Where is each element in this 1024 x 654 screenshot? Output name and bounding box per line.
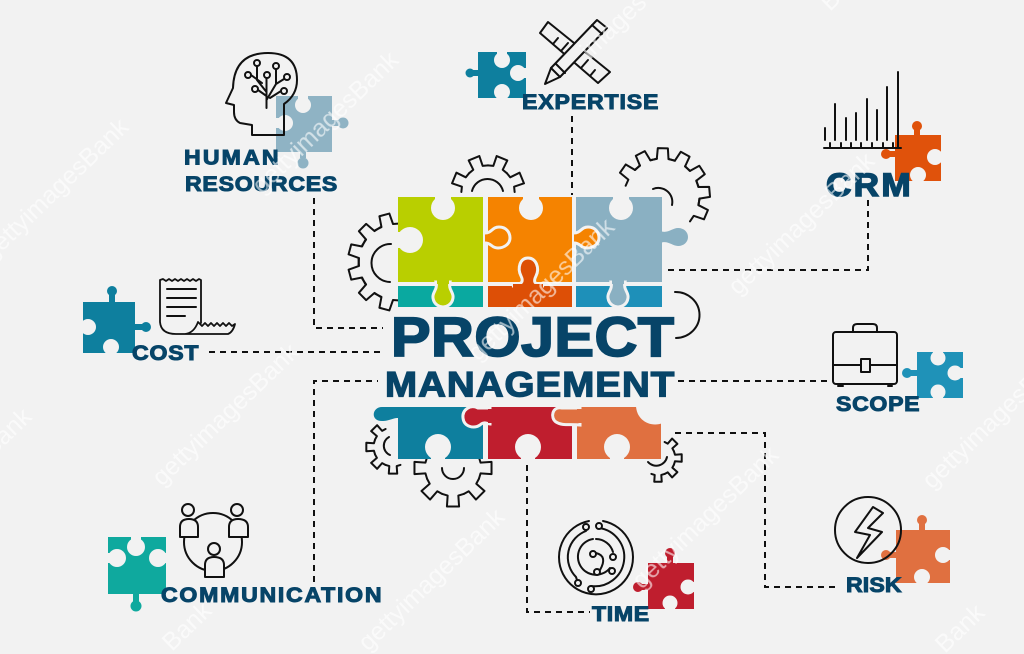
- piece: red-orange strip: [488, 286, 572, 307]
- puzzle piece: teal blue: [80, 286, 151, 355]
- gear: left: [347, 212, 400, 312]
- gear: lower centre: [414, 457, 492, 507]
- label: scope: SCOPE: [836, 392, 920, 416]
- gear: top inner arc: [472, 179, 503, 191]
- panel: risk: [835, 497, 952, 597]
- watermark: gettyimagesBank: [627, 441, 784, 594]
- icon: orbit clock: [559, 521, 633, 594]
- puzzle piece: red: [633, 548, 696, 611]
- piece: lime green: [396, 195, 483, 307]
- title: management: MANAGEMENT: [385, 365, 675, 404]
- gear: top: [450, 154, 526, 192]
- label: cost: COST: [132, 341, 199, 365]
- piece: blue strip: [576, 286, 662, 307]
- label: time: TIME: [592, 602, 649, 626]
- piece: blue grey: [574, 195, 688, 307]
- puzzle piece: teal: [106, 535, 168, 612]
- piece: red: [463, 407, 572, 460]
- icon: lightning bolt in circle: [835, 497, 901, 563]
- piece: orange: [485, 195, 572, 282]
- central puzzle: lower row: [374, 405, 663, 460]
- panel: crm: [824, 72, 943, 204]
- watermark: gettyimagesBank: [147, 338, 304, 491]
- label: human: HUMAN: [184, 145, 279, 169]
- gear: lower centre inner arc: [442, 468, 464, 479]
- label: communication: COMMUNICATION: [161, 583, 382, 607]
- watermark: gettyimagesBank: [463, 213, 620, 366]
- icon: people network: [180, 504, 248, 577]
- piece: coral: [553, 405, 663, 460]
- label: risk: RISK: [846, 573, 902, 597]
- icon: ruler and pencil: [540, 20, 610, 84]
- gear: lower right: [651, 437, 682, 482]
- gear: top right: [616, 148, 711, 226]
- title: [385, 307, 675, 404]
- piece: teal blue: [374, 407, 483, 460]
- label: crm: CRM: [826, 168, 911, 204]
- panel: time: [559, 521, 696, 626]
- gear: lower left: [366, 423, 400, 474]
- arc: right of puzzle: [675, 292, 700, 338]
- icon: head with circuit tree: [226, 53, 297, 135]
- panel: communication: [106, 504, 382, 612]
- puzzle piece: coral: [881, 515, 952, 585]
- watermark: gettyimagesBank: [247, 46, 404, 199]
- icon: bar chart: [824, 72, 901, 148]
- dashed connectors: [209, 116, 868, 612]
- icon: receipt: [160, 279, 235, 334]
- icon: briefcase: [833, 324, 897, 386]
- watermark: gettyimagesBank: [723, 147, 880, 300]
- watermark: gettyimagesBank: [353, 503, 510, 654]
- gear: lower left inner arc: [384, 437, 390, 455]
- puzzle piece: orange red: [881, 121, 943, 183]
- label: expertise: EXPERTISE: [522, 90, 658, 114]
- panel: expertise: [466, 20, 658, 114]
- puzzle piece: blue grey: [274, 94, 348, 168]
- gear: left inner arc: [372, 244, 391, 282]
- central gears: [347, 148, 711, 507]
- title: project: PROJECT: [391, 307, 674, 369]
- panel: scope: [833, 324, 965, 416]
- gear: lower right inner arc: [648, 457, 667, 466]
- piece: red-orange rising tab: [512, 258, 544, 288]
- puzzle piece: teal blue: [466, 50, 528, 100]
- panel: cost: [80, 279, 235, 365]
- puzzle piece: blue: [902, 350, 965, 400]
- gear: top right inner arc: [653, 188, 672, 205]
- central puzzle: upper row: [396, 195, 688, 307]
- piece: teal strip: [398, 286, 483, 307]
- label: resources: RESOURCES: [185, 172, 337, 196]
- panel: human resources: [184, 53, 348, 196]
